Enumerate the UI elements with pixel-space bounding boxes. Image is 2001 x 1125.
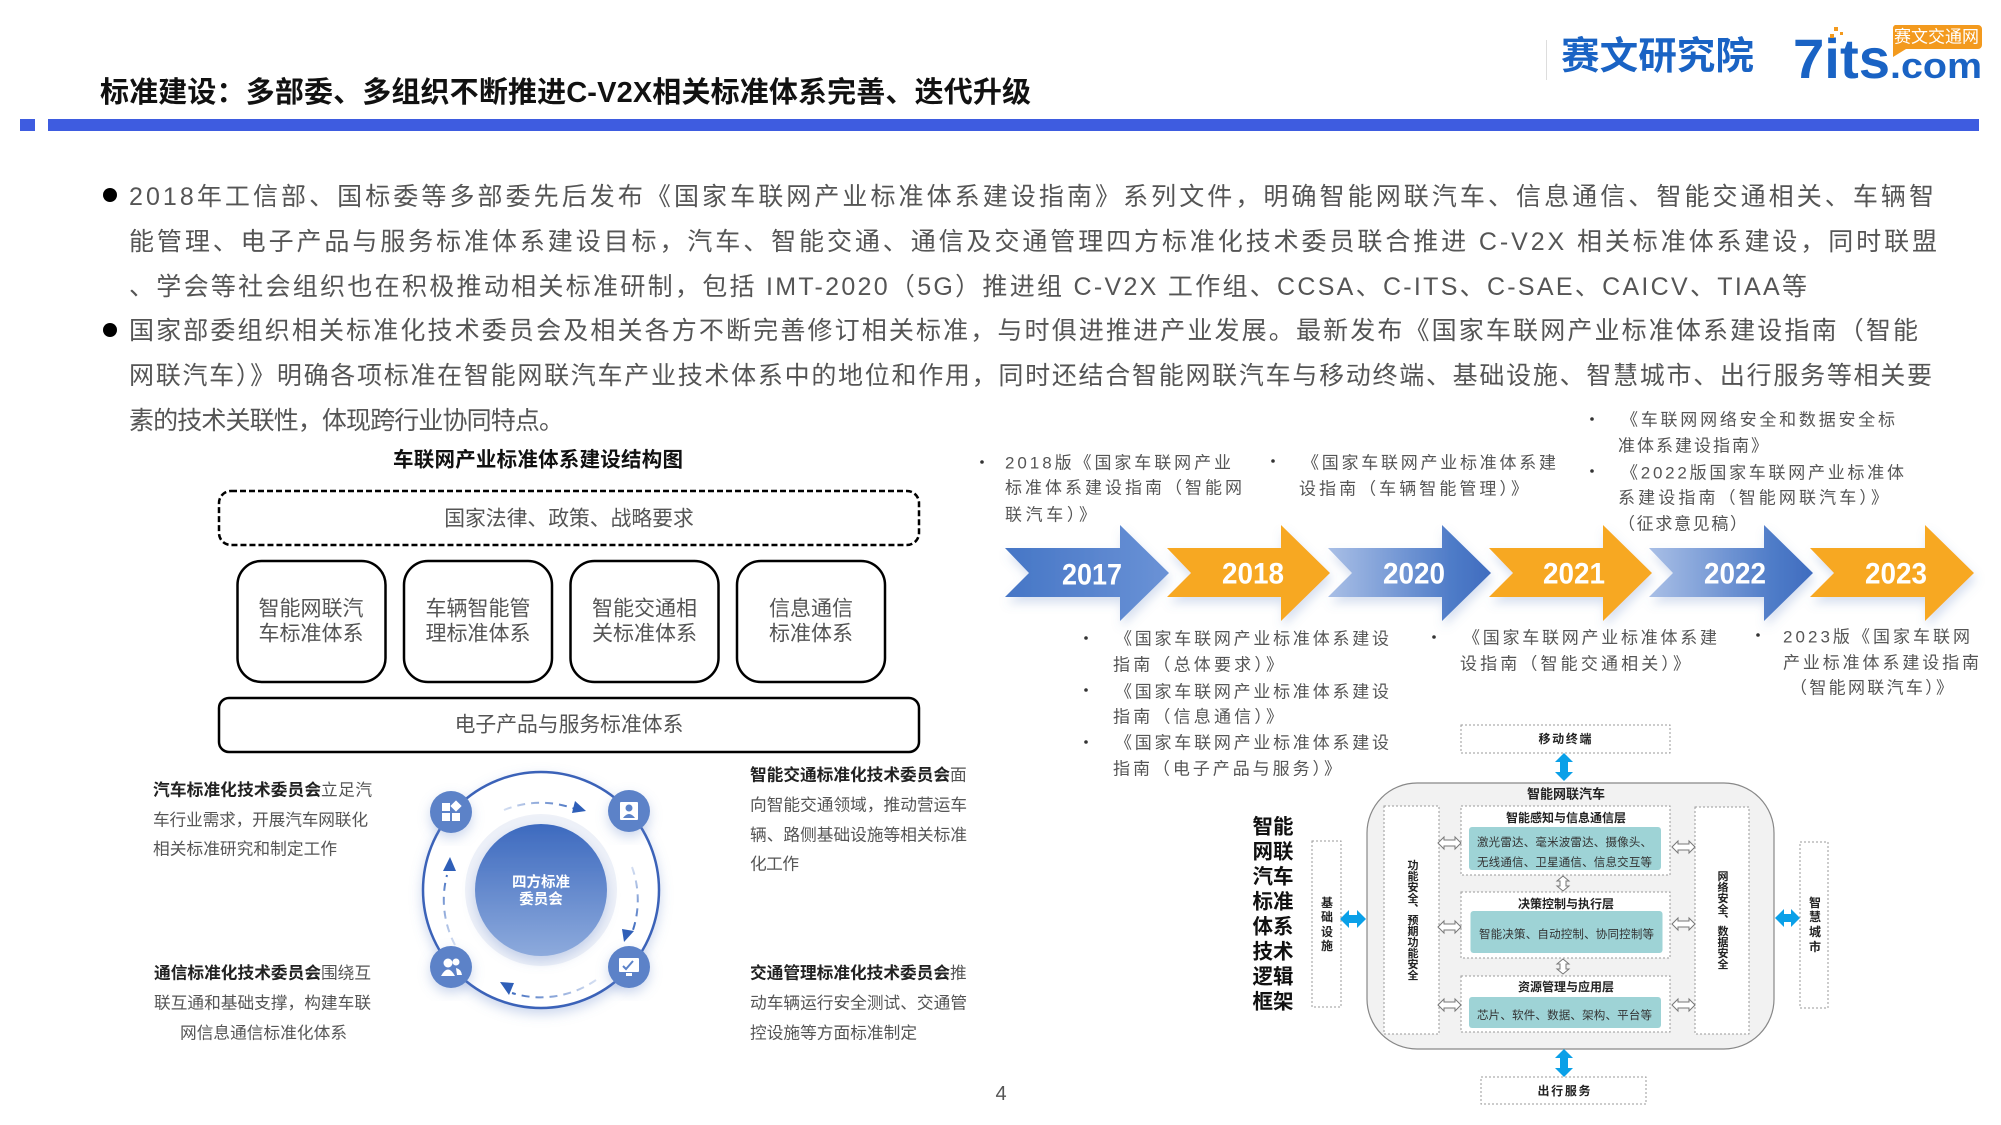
committee text: telecom: 网信息通信标准化体系 bbox=[180, 1024, 347, 1042]
electronics and services box bbox=[219, 698, 919, 752]
layer: perception: 无线通信、卫星通信、信息交互等 bbox=[1477, 855, 1652, 869]
timeline arrows bbox=[1005, 525, 1974, 621]
note 2017 guide list bbox=[1084, 630, 1389, 778]
note 2017 guide list: 指南（总体要求）》 bbox=[1113, 656, 1283, 674]
body text bbox=[103, 183, 1937, 435]
note 2017 guide list: 指南（电子产品与服务）》 bbox=[1113, 760, 1341, 778]
framework heading bbox=[1252, 816, 1294, 1014]
layer: resources: 资源管理与应用层 bbox=[1518, 979, 1614, 994]
logo: 7its.com: .com bbox=[1890, 45, 1982, 86]
note 2023: 2023版《国家车联网 bbox=[1783, 628, 1970, 646]
bullet 2 bbox=[103, 323, 117, 337]
framework heading: 体系 bbox=[1252, 916, 1294, 938]
year labels: 2020 bbox=[1383, 558, 1445, 590]
connected vehicle container bbox=[1367, 783, 1774, 1049]
mobility services box bbox=[1481, 1077, 1646, 1104]
framework heading: 逻辑 bbox=[1252, 966, 1294, 988]
committee text: telecom: 通信标准化技术委员会 bbox=[154, 962, 321, 982]
committee text: telecom: 围绕互 bbox=[321, 964, 371, 982]
box: connected vehicles: 智能网联汽 bbox=[258, 598, 364, 620]
note 2017 guide list: 指南（信息通信）》 bbox=[1113, 708, 1283, 726]
framework heading: 技术 bbox=[1252, 940, 1294, 964]
note 2017: 2018版《国家车联网产业 bbox=[1005, 454, 1231, 472]
note 2017: 标准体系建设指南（智能网 bbox=[1005, 478, 1242, 498]
committee text: traffic management: 推 bbox=[950, 964, 967, 982]
dashed policy box bbox=[219, 491, 919, 545]
body line 4: 国家部委组织相关标准化技术委员会及相关各方不断完善修订相关标准，与时俱进推进产业发展。最新发布《国家车联网产业标准体系建设指南（智能 bbox=[129, 317, 1918, 345]
note 2023 bbox=[1756, 628, 1979, 698]
note 2023: 产业标准体系建设指南 bbox=[1783, 654, 1979, 672]
note 2020: 设指南（智能交通相关）》 bbox=[1460, 654, 1690, 674]
bullet 1 bbox=[103, 188, 117, 202]
electronics label: 电子产品与服务标准体系 bbox=[455, 714, 683, 736]
centre disc bbox=[475, 824, 607, 956]
note 2017: 联汽车）》 bbox=[1005, 506, 1096, 524]
network security column bbox=[1695, 807, 1749, 1034]
panel: four committees bbox=[153, 764, 967, 1042]
blue double arrows bbox=[1340, 753, 1800, 1077]
cycle arrows bbox=[443, 801, 638, 997]
logo bbox=[1546, 25, 1982, 90]
layer: perception: 激光雷达、毫米波雷达、摄像头、 bbox=[1477, 835, 1652, 849]
arrow 2023 bbox=[1810, 525, 1974, 621]
year labels: 2017 bbox=[1062, 558, 1122, 592]
committee text: automotive bbox=[153, 780, 372, 858]
framework heading: 标准 bbox=[1252, 890, 1294, 914]
box: connected vehicles bbox=[238, 561, 386, 682]
arrow 2018 bbox=[1167, 525, 1330, 621]
header rule bbox=[20, 119, 1979, 131]
icon: bottom-left people bbox=[430, 946, 472, 988]
year labels: 2018 bbox=[1222, 558, 1284, 590]
title: 标准建设：多部委、多组织不断推进C-V2X相关标准体系完善、迭代升级 bbox=[100, 76, 1031, 109]
note 2021: 《车联网网络安全和数据安全标 bbox=[1621, 410, 1895, 430]
note 2021: 系建设指南（智能网联汽车）》 bbox=[1618, 488, 1888, 508]
body line 2: 能管理、电子产品与服务标准体系建设目标，汽车、智能交通、通信及交通管理四方标准化技术委员联合推进 C-V2X 相关标准体系建设，同时联盟 bbox=[129, 228, 1937, 256]
mobility services box: 出行服务 bbox=[1538, 1083, 1590, 1098]
smart city box: 市 bbox=[1809, 939, 1821, 954]
layer: decision bbox=[1461, 892, 1670, 958]
note 2017 bbox=[980, 454, 1242, 524]
committee text: intelligent transport: 化工作 bbox=[750, 854, 799, 874]
framework heading: 汽车 bbox=[1252, 864, 1294, 888]
layer: decision: 决策控制与执行层 bbox=[1518, 896, 1614, 911]
committee text: traffic management bbox=[750, 962, 967, 1042]
functional safety column bbox=[1384, 806, 1439, 1034]
inner halo bbox=[465, 814, 617, 966]
logo: 7its.com: 7its bbox=[1793, 27, 1890, 90]
note 2018: 《国家车联网产业标准体系建 bbox=[1302, 454, 1556, 472]
logo: 7its.com bbox=[1546, 25, 1982, 90]
box: vehicle management bbox=[404, 561, 552, 682]
smart city box: 智 bbox=[1809, 895, 1821, 910]
hollow connector arrows bbox=[1438, 837, 1695, 1011]
committee text: intelligent transport: 向智能交通领域，推动营运车 bbox=[750, 796, 967, 814]
note 2018 bbox=[1271, 454, 1556, 498]
body line 3: 、学会等社会组织也在积极推动相关标准研制，包括 IMT-2020（5G）推进组 C-V2X 工作组、CCSA、C-ITS、C-SAE、CAICV、TIAA等 bbox=[129, 273, 1807, 301]
body line 5: 网联汽车）》明确各项标准在智能网联汽车产业技术体系中的地位和作用，同时还结合智能网联汽车与移动终端、基础设施、智慧城市、出行服务等相关要 bbox=[129, 362, 1932, 390]
centre label bbox=[512, 873, 570, 908]
infrastructure box: 础 bbox=[1321, 910, 1333, 924]
year labels bbox=[1062, 558, 1927, 592]
smart city box: 慧 bbox=[1809, 909, 1821, 924]
framework heading: 智能 bbox=[1252, 816, 1294, 838]
note 2017 guide list: 《国家车联网产业标准体系建设 bbox=[1115, 734, 1389, 752]
committee text: intelligent transport bbox=[750, 764, 967, 874]
note 2021: 准体系建设指南》 bbox=[1618, 436, 1768, 456]
box: vehicle management: 理标准体系 bbox=[426, 622, 530, 646]
infrastructure box: 设 bbox=[1321, 925, 1333, 939]
committee text: traffic management: 交通管理标准化技术委员会 bbox=[750, 962, 950, 982]
committee text: traffic management: 控设施等方面标准制定 bbox=[750, 1024, 917, 1042]
body line 6: 素的技术关联性，体现跨行业协同特点。 bbox=[129, 407, 564, 435]
arrow 2020 bbox=[1328, 525, 1491, 621]
layer: decision: 智能决策、自动控制、协同控制等 bbox=[1479, 927, 1654, 941]
icon: top-left apps bbox=[430, 791, 472, 833]
note 2017 guide list: 《国家车联网产业标准体系建设 bbox=[1115, 630, 1389, 648]
body line 1: 2018年工信部、国标委等多部委先后发布《国家车联网产业标准体系建设指南》系列文件，明确智能网联汽车、信息通信、智能交通相关、车辆智 bbox=[129, 183, 1934, 211]
centre label: 四方标准 bbox=[512, 873, 570, 891]
note 2021: （征求意见稿） bbox=[1618, 514, 1747, 534]
note 2020: 《国家车联网产业标准体系建 bbox=[1463, 628, 1717, 648]
box: intelligent transport: 智能交通相 bbox=[592, 598, 697, 620]
committee text: automotive: 汽车标准化技术委员会 bbox=[153, 780, 321, 800]
box: intelligent transport: 关标准体系 bbox=[592, 622, 697, 646]
page number: 4 bbox=[995, 1083, 1007, 1105]
infrastructure box: 基 bbox=[1321, 895, 1333, 910]
layer: perception: 智能感知与信息通信层 bbox=[1506, 810, 1626, 825]
network security column: 网络安全、数据安全 bbox=[1716, 870, 1728, 970]
committee text: intelligent transport: 辆、路侧基础设施等相关标准 bbox=[750, 826, 967, 844]
box: ICT: 信息通信 bbox=[769, 598, 853, 620]
committee text: automotive: 立足汽 bbox=[321, 780, 372, 800]
mobile terminal box: 移动终端 bbox=[1538, 731, 1592, 746]
note 2020 bbox=[1432, 628, 1717, 674]
functional safety column: 功能安全、预期功能安全 bbox=[1406, 858, 1418, 980]
note 2021 bbox=[1590, 410, 1904, 534]
arrow 2022 bbox=[1649, 525, 1813, 621]
committee text: telecom bbox=[154, 962, 371, 1042]
logo: 7its.com: 赛文交通网 bbox=[1894, 26, 1979, 46]
box: connected vehicles: 车标准体系 bbox=[258, 622, 364, 646]
note 2017 guide list: 《国家车联网产业标准体系建设 bbox=[1115, 682, 1389, 702]
container title: 智能网联汽车 bbox=[1527, 786, 1605, 802]
committee text: automotive: 相关标准研究和制定工作 bbox=[153, 840, 337, 858]
panel: technical framework bbox=[1252, 725, 1828, 1104]
mobile terminal box bbox=[1461, 725, 1670, 753]
layer: resources: 芯片、软件、数据、架构、平台等 bbox=[1477, 1008, 1652, 1022]
box: ICT: 标准体系 bbox=[769, 622, 853, 646]
diagram heading: 车联网产业标准体系建设结构图 bbox=[393, 448, 683, 472]
note 2021: 《2022版国家车联网产业标准体 bbox=[1621, 464, 1904, 482]
smart city box: 城 bbox=[1809, 924, 1821, 939]
icon: top-right profile bbox=[608, 790, 650, 832]
committee text: automotive: 车行业需求，开展汽车网联化 bbox=[153, 810, 368, 830]
box: ICT bbox=[737, 561, 885, 682]
committee text: intelligent transport: 面 bbox=[950, 766, 967, 784]
layer: resources bbox=[1461, 976, 1670, 1032]
logo: institute name: 赛文研究院 bbox=[1561, 36, 1754, 78]
arrow 2017 bbox=[1005, 525, 1169, 621]
panel: standards structure diagram bbox=[219, 448, 919, 752]
smart city box bbox=[1800, 842, 1828, 1008]
year labels: 2022 bbox=[1704, 558, 1766, 590]
icon: bottom-right monitor bbox=[608, 946, 650, 988]
centre label: 委员会 bbox=[519, 890, 563, 908]
note 2018: 设指南（车辆智能管理）》 bbox=[1299, 480, 1528, 498]
circular diagram bbox=[423, 772, 659, 1008]
committee text: intelligent transport: 智能交通标准化技术委员会 bbox=[750, 764, 950, 784]
layer: perception bbox=[1461, 806, 1670, 875]
box: vehicle management: 车辆智能管 bbox=[426, 598, 530, 620]
note 2023: （智能网联汽车）》 bbox=[1790, 678, 1953, 698]
infrastructure box bbox=[1312, 841, 1341, 1007]
committee text: traffic management: 动车辆运行安全测试、交通管 bbox=[750, 994, 967, 1012]
framework heading: 框架 bbox=[1252, 990, 1294, 1014]
panel: release timeline bbox=[980, 410, 1979, 778]
framework heading: 网联 bbox=[1252, 840, 1294, 864]
arrow 2021 bbox=[1489, 525, 1652, 621]
year labels: 2021 bbox=[1543, 558, 1605, 590]
box: intelligent transport bbox=[570, 561, 718, 682]
committee text: telecom: 联互通和基础支撑，构建车联 bbox=[154, 994, 371, 1012]
infrastructure box: 施 bbox=[1321, 938, 1333, 953]
policy label: 国家法律、政策、战略要求 bbox=[444, 508, 694, 530]
year labels: 2023 bbox=[1865, 558, 1927, 590]
outer ring bbox=[423, 772, 659, 1008]
